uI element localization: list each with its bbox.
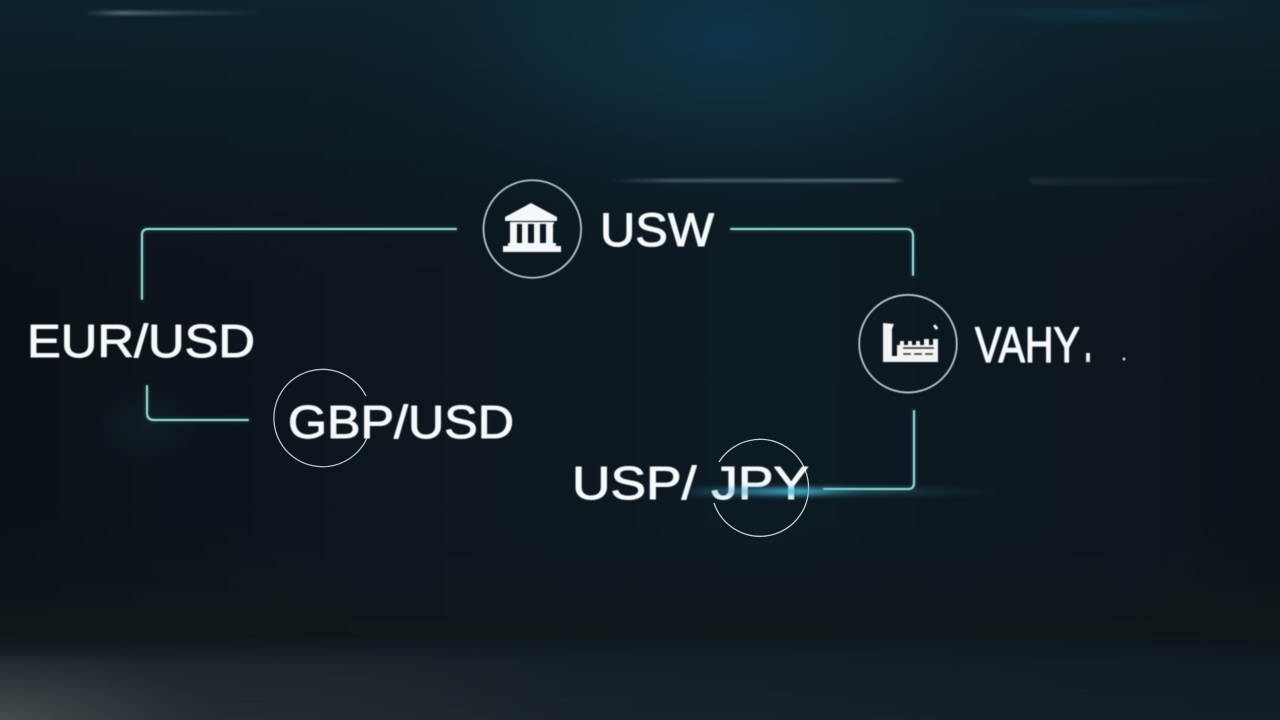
ring: JPY (714, 439, 809, 536)
connector lines (142, 229, 914, 489)
icon: factory (883, 323, 938, 362)
node: WHY (859, 295, 1126, 393)
node: EUR/USD: EUR/USD (27, 315, 255, 367)
flare (680, 488, 1000, 495)
label: garbled WHY: VAHY (975, 317, 1080, 373)
icon ring: factory (859, 295, 957, 393)
icon: bank (503, 203, 561, 252)
node: USW (484, 180, 715, 278)
node: GBP/USD (274, 369, 514, 467)
label: USP/ JPY: USP/ JPY (572, 457, 809, 509)
label: GBP/USD: GBP/USD (288, 396, 514, 448)
label: USW: USW (600, 203, 715, 256)
ring: GBP (274, 369, 367, 467)
icon ring: USW (484, 180, 581, 278)
label: faint dot (1122, 357, 1126, 361)
label: trailing dot (1086, 353, 1090, 362)
node: USD/JPY (572, 439, 1000, 536)
